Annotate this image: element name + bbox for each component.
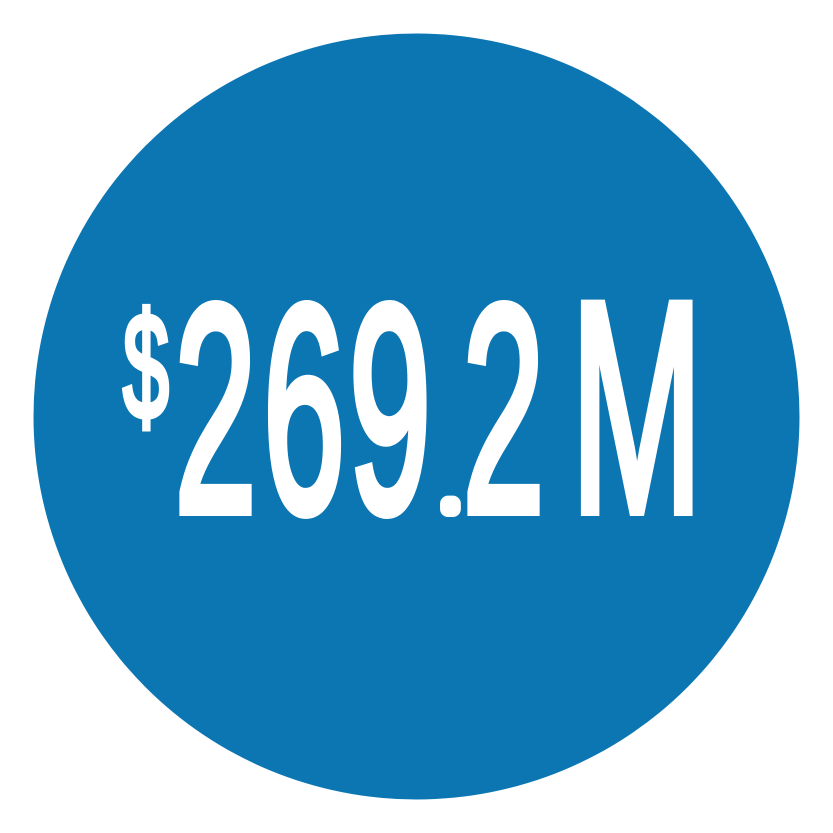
decimal point: . xyxy=(444,464,457,520)
digit 2: 2 xyxy=(174,245,257,574)
value: $269.2 M xyxy=(123,240,703,575)
digit 9: 9 xyxy=(349,245,431,574)
digit 6: 6 xyxy=(263,245,345,574)
letter M: M xyxy=(570,240,703,575)
dollar sign: $ xyxy=(123,282,169,450)
digit 2: 2 xyxy=(462,245,545,574)
